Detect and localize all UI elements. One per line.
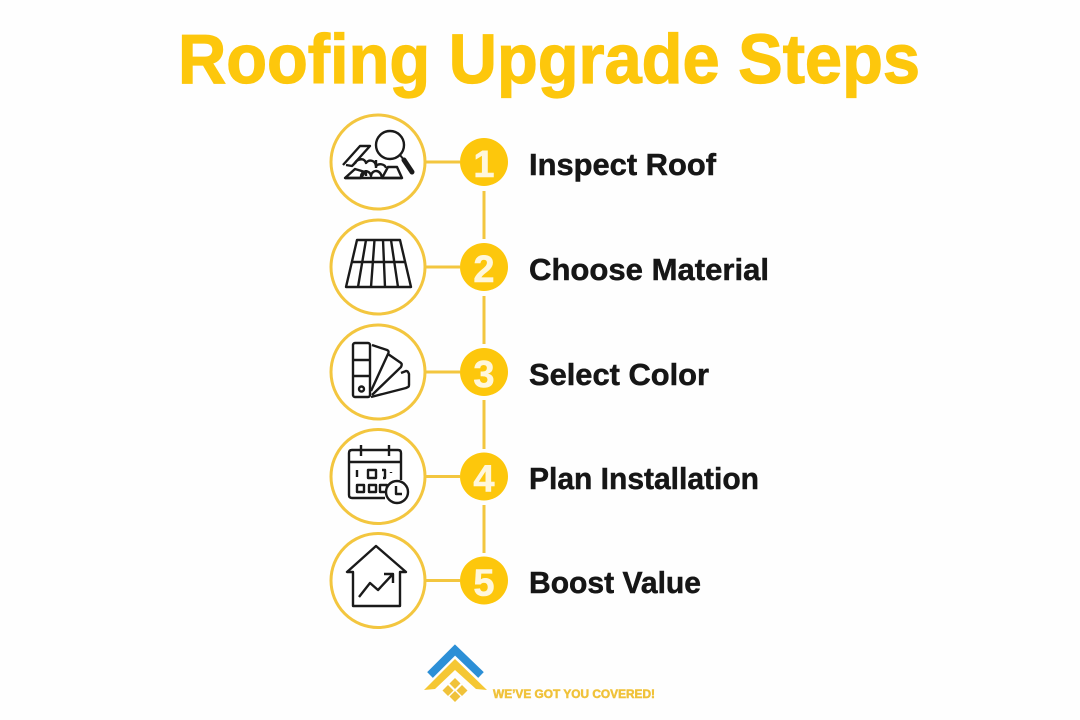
logo	[424, 650, 655, 702]
title: Roofing Upgrade Steps	[178, 20, 920, 98]
label 3: Select Color	[529, 357, 709, 392]
logo tagline: WE’VE GOT YOU COVERED!	[493, 689, 655, 701]
number 1: 1	[473, 144, 495, 186]
icon: roof inspection	[343, 131, 412, 178]
number badge 3	[460, 348, 508, 396]
number 3: 3	[473, 354, 495, 396]
step 5	[331, 534, 701, 628]
logo: blue roof	[430, 650, 481, 675]
icon: roof material	[346, 240, 411, 287]
connector 4	[425, 475, 460, 478]
connector 3	[425, 370, 460, 374]
connector 5	[425, 579, 460, 582]
number badge 1	[460, 138, 508, 186]
connector 1	[425, 160, 460, 164]
connector 2	[425, 266, 460, 268]
number badge 2	[460, 243, 508, 291]
number 2: 2	[473, 249, 495, 291]
timeline connector	[482, 191, 486, 553]
icon circle 3	[331, 325, 425, 419]
logo: yellow roof	[424, 659, 487, 690]
icon circle 4	[331, 430, 425, 524]
label 5: Boost Value	[529, 565, 701, 600]
step 4	[331, 430, 759, 524]
icon: calendar and clock	[349, 445, 408, 503]
number badge 4	[460, 452, 508, 500]
label 1: Inspect Roof	[529, 147, 717, 182]
logo: diamonds	[442, 678, 468, 702]
icon circle 5	[331, 534, 425, 628]
number 5: 5	[473, 562, 495, 604]
number badge 5	[460, 556, 508, 604]
number 4: 4	[473, 458, 495, 500]
step 2	[331, 220, 769, 314]
icon: house value growth	[347, 546, 406, 606]
step 1	[331, 115, 717, 209]
icon circle 2	[331, 220, 425, 314]
step 3	[331, 325, 709, 419]
label 2: Choose Material	[529, 252, 769, 287]
label 4: Plan Installation	[529, 461, 759, 496]
icon: colour swatch fan	[353, 343, 409, 397]
icon circle 1	[331, 115, 425, 209]
